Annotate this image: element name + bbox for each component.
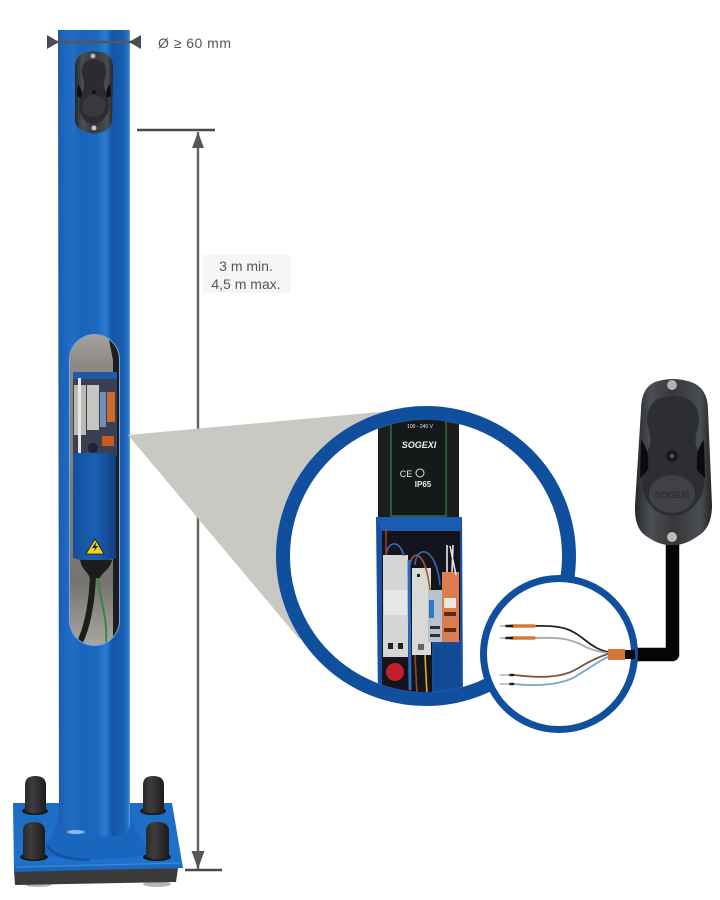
bolt: top left xyxy=(22,776,48,815)
wires xyxy=(386,530,456,695)
terminal compartment xyxy=(73,372,117,456)
wires xyxy=(500,626,608,685)
orange terminals xyxy=(442,572,459,642)
pole xyxy=(58,30,130,837)
base plate xyxy=(13,803,183,887)
sensor cable xyxy=(630,540,672,654)
terminal enclosure xyxy=(376,517,463,700)
red button xyxy=(386,663,404,681)
orange sleeve xyxy=(608,649,625,660)
pole access window xyxy=(69,334,120,646)
module one xyxy=(383,555,408,657)
sensor on pole xyxy=(75,52,113,134)
rubber pad and feet xyxy=(14,868,178,887)
height dimension arrow xyxy=(137,130,222,870)
diameter label: Ø ≥ 60 mm xyxy=(158,35,231,51)
power supply: 100 - 240 V xyxy=(407,424,434,430)
warning sign xyxy=(86,539,104,554)
sensor enlarged: SOGEXI xyxy=(655,490,689,500)
bolt: bottom left xyxy=(20,822,48,861)
power supply: CE xyxy=(400,469,412,479)
bolt: top right xyxy=(140,776,166,815)
power supply: IP65 xyxy=(415,480,432,489)
wiring detail circle xyxy=(484,578,635,730)
power supply xyxy=(378,420,459,517)
zoom wedge xyxy=(128,411,390,640)
power supply: SOGEXI xyxy=(402,440,437,450)
cable gland and cables xyxy=(80,560,112,642)
diameter dimension arrow xyxy=(47,35,141,49)
module two xyxy=(412,568,431,655)
height label: 3 m min. xyxy=(219,258,273,274)
blue device body xyxy=(73,453,116,561)
bolt: bottom right xyxy=(143,822,171,861)
blue terminals xyxy=(428,590,442,642)
height label: 4,5 m max. xyxy=(211,276,281,292)
sensor enlarged xyxy=(635,379,712,545)
anchor bolts xyxy=(20,776,171,861)
enlarged view circle xyxy=(283,379,712,730)
height label xyxy=(203,255,291,293)
